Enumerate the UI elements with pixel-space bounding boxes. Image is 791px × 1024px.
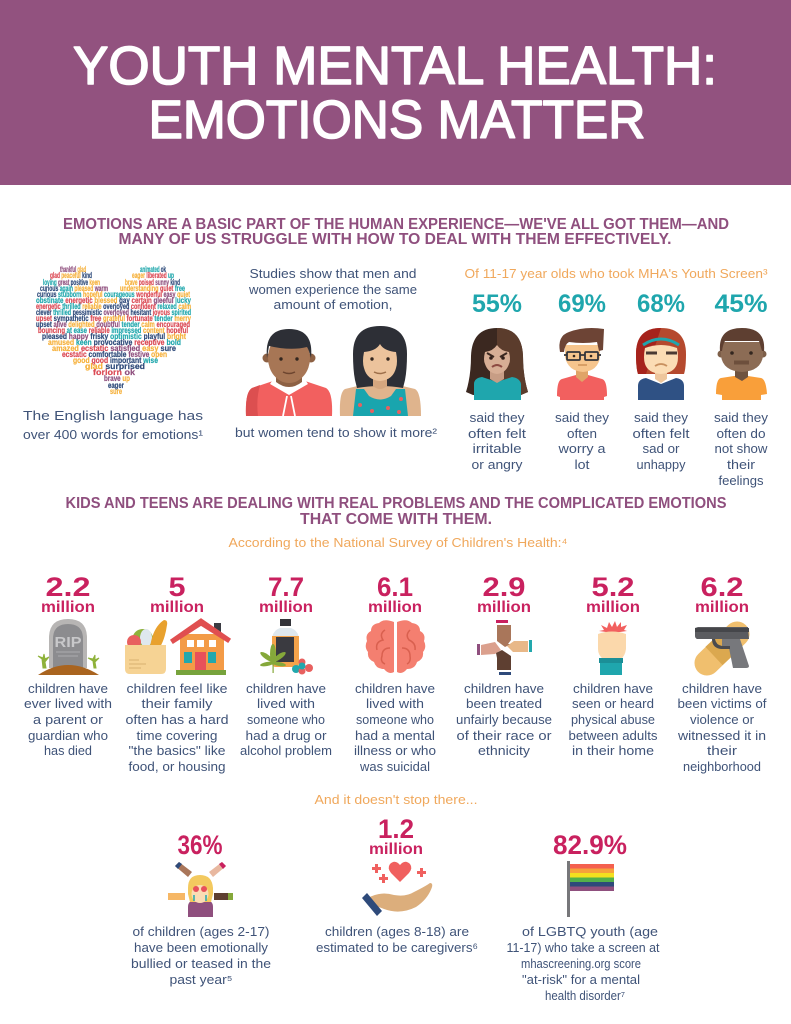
- word cloud heart: upset sympathetic free grateful fortunate tender merry: [36, 314, 191, 323]
- heart caption: over 400 words for emotions¹: [23, 427, 204, 442]
- label: health disorder⁷: [545, 988, 625, 1003]
- label: irritable: [472, 441, 522, 456]
- label: [506, 924, 660, 1003]
- icon: fist with impact: [598, 621, 627, 675]
- word cloud heart: amazed ecstatic satisfied easy sure: [52, 344, 176, 353]
- stat: 6.1 million: million: [368, 599, 422, 616]
- stat: 7.7 million: 7.7: [268, 572, 304, 602]
- stat: 6.2 million: million: [695, 599, 749, 616]
- stat: 5.2 million: million: [586, 599, 640, 616]
- stat: 36% bullied: 36%: [178, 830, 222, 860]
- stat: 5.2 million: [568, 572, 658, 758]
- label: [568, 681, 658, 758]
- word cloud heart: eager liberated up: [132, 271, 174, 280]
- section heading: real problems: THAT COME WITH THEM.: [300, 511, 492, 528]
- label: [677, 681, 767, 774]
- label: of LGBTQ youth (age: [522, 924, 658, 939]
- stat: 2.2 million: million: [41, 599, 95, 616]
- stat: 68% sad: 68%: [637, 290, 685, 318]
- word cloud heart: thankful glad: [60, 265, 86, 274]
- label: said they: [634, 410, 689, 425]
- stat: 69% worry: 69%: [558, 290, 606, 318]
- label: alcohol problem: [240, 743, 332, 758]
- stat: 69% worry: [555, 290, 610, 472]
- stat: 6.1 million: 6.1: [377, 572, 413, 602]
- label: ethnicity: [478, 743, 531, 758]
- label: often do: [716, 426, 766, 441]
- stat: 2.9 million: 2.9: [482, 572, 526, 602]
- label: been treated: [466, 696, 542, 711]
- word cloud heart: obstinate energetic blessed gay certain gleeful lucky: [36, 296, 191, 305]
- word cloud heart: sure: [110, 387, 122, 396]
- stat: 82.9% LGBTQ: 82.9%: [553, 830, 627, 860]
- word cloud heart: energetic thrilled reliable overjoyed confident relaxed calm: [36, 302, 191, 311]
- label: children have: [682, 681, 762, 696]
- stat: 1.2 million caregivers: 1.2: [378, 814, 414, 844]
- stat: 5 million: 5: [168, 572, 186, 602]
- label: violence or: [690, 712, 755, 727]
- label: often felt: [468, 426, 526, 441]
- icon: gravestone: RIP: [54, 634, 82, 651]
- label: children have: [573, 681, 653, 696]
- youth screen lead-in: Of 11-17 year olds who took MHA's Youth Screen³: [464, 267, 768, 281]
- label: sad or: [642, 441, 680, 456]
- icon: sad girl with headband: [636, 328, 686, 400]
- label: of their race or: [456, 728, 552, 743]
- stat: 6.2 million: [677, 572, 767, 774]
- intro heading: [63, 216, 729, 248]
- studies text: amount of emotion,: [274, 297, 392, 312]
- label: seen or heard: [572, 696, 654, 711]
- label: estimated to be caregivers⁶: [316, 940, 478, 955]
- word cloud heart: good good important wise: [73, 356, 158, 365]
- label: said they: [714, 410, 769, 425]
- label: worry a: [557, 441, 606, 456]
- icon: gravestone: [38, 619, 99, 675]
- icon: bottle, leaf and pills: [259, 619, 313, 674]
- word cloud heart: curious again pleased warm: [40, 284, 108, 293]
- label: [240, 681, 332, 758]
- label: been victims of: [678, 696, 767, 711]
- label: mhascreening.org score: [521, 956, 641, 971]
- icon: neutral boy: [716, 328, 767, 400]
- label: said they: [555, 410, 610, 425]
- icon: bullied child pointed at: [168, 862, 233, 917]
- label: unfairly because: [456, 712, 552, 727]
- word cloud heart: forlorn ok: [93, 368, 136, 377]
- label: in their home: [572, 743, 654, 758]
- title: EMOTIONS MATTER: [148, 90, 646, 150]
- word cloud heart: pleased happy frisky optimistic playful bright: [42, 332, 186, 341]
- word cloud heart: [36, 265, 191, 396]
- label: past year⁵: [170, 972, 232, 987]
- label: food, or housing: [128, 759, 226, 774]
- label: [24, 681, 112, 758]
- caption: women show it more: but women tend to show it more²: [235, 425, 438, 440]
- label: children feel like: [126, 681, 228, 696]
- stat: 2.2 million: 2.2: [46, 572, 90, 602]
- stat: 55% irritable: 55%: [472, 290, 522, 318]
- icon: groceries: [125, 620, 167, 674]
- label: time covering: [136, 728, 218, 743]
- word cloud heart: brave up: [104, 374, 130, 383]
- word cloud heart: eager: [108, 381, 124, 390]
- section heading: real problems: KIDS AND TEENS ARE DEALING WITH REAL PROBLEMS AND THE COMPLICATED EMOTIONS: [66, 495, 727, 512]
- label: or angry: [472, 457, 523, 472]
- studies text: [248, 266, 417, 312]
- word cloud heart: curious stubborn hopeful courageous wonderful easy quiet: [37, 290, 190, 299]
- stat: 6.2 million: 6.2: [700, 572, 744, 602]
- label: children have: [246, 681, 326, 696]
- label: "at-risk" for a mental: [522, 972, 640, 987]
- survey lead-in: According to the National Survey of Children's Health:⁴: [228, 536, 568, 550]
- label: their: [707, 743, 738, 758]
- label: between adults: [568, 728, 658, 743]
- icon: gun and bandage: [695, 627, 749, 668]
- label: of children (ages 2-17): [132, 924, 270, 939]
- intro heading: MANY OF US STRUGGLE WITH HOW TO DEAL WITH THEM EFFECTIVELY.: [118, 231, 672, 248]
- label: someone who: [356, 712, 434, 727]
- label: children have: [355, 681, 435, 696]
- word cloud heart: animated ok: [140, 265, 166, 274]
- stat: 5.2 million: 5.2: [592, 572, 634, 602]
- stat: 5 million: [125, 572, 230, 774]
- label: [468, 410, 526, 472]
- stat: 2.9 million: [456, 572, 552, 758]
- icon: four hands: [477, 620, 532, 675]
- label: was suicidal: [359, 759, 430, 774]
- word cloud heart: bouncing at ease reliable impressed content hopeful: [38, 326, 188, 335]
- label: a parent or: [33, 712, 104, 727]
- word cloud heart: glad peaceful kind: [50, 271, 92, 280]
- label: 11-17) who take a screen at: [506, 940, 660, 955]
- label: have been emotionally: [134, 940, 269, 955]
- label: "the basics" like: [128, 743, 226, 758]
- label: often has a hard: [126, 712, 228, 727]
- studies text: Studies show that men and: [250, 266, 416, 281]
- label: had a drug or: [246, 728, 327, 743]
- label: [316, 924, 478, 955]
- label: said they: [470, 410, 525, 425]
- stat: 6.1 million: [354, 572, 436, 774]
- intro heading: EMOTIONS ARE A BASIC PART OF THE HUMAN EXPERIENCE—WE'VE ALL GOT THEM—AND: [63, 216, 729, 233]
- icon: rainbow flag: [567, 861, 614, 917]
- label: guardian who: [28, 728, 108, 743]
- label: children (ages 8-18) are: [325, 924, 469, 939]
- label: witnessed it in: [677, 728, 766, 743]
- label: [131, 924, 271, 987]
- word cloud heart: loving great positive keen: [43, 278, 100, 287]
- section heading: real problems: [66, 495, 727, 528]
- icon: boy with glasses: [557, 328, 607, 400]
- icon: house: [171, 619, 230, 675]
- label: [354, 681, 436, 774]
- label: unhappy: [636, 457, 686, 472]
- label: ever lived with: [24, 696, 112, 711]
- label: had a mental: [355, 728, 435, 743]
- title: [73, 36, 717, 150]
- icon: hand holding heart: [362, 862, 432, 916]
- word cloud heart: upset alive delighted doubtful tender calm encouraged: [36, 320, 190, 329]
- label: their family: [142, 696, 213, 711]
- icon: brain: [366, 620, 425, 673]
- label: often: [567, 426, 597, 441]
- stat: 36% bullied: [131, 830, 271, 987]
- label: feelings: [718, 473, 764, 488]
- label: their: [727, 457, 756, 472]
- heart caption: The English language has: [23, 408, 204, 423]
- label: physical abuse: [571, 712, 655, 727]
- stat: 2.9 million: million: [477, 599, 531, 616]
- stat: 55% irritable: [466, 290, 528, 472]
- label: neighborhood: [683, 759, 761, 774]
- stat: 1.2 million caregivers: million: [369, 841, 423, 858]
- label: lot: [574, 457, 590, 472]
- title: YOUTH MENTAL HEALTH:: [73, 36, 717, 96]
- lead-in: it doesn't stop there: And it doesn't stop there...: [314, 793, 478, 807]
- icon: angry girl: [466, 328, 528, 400]
- stat: 5 million: million: [150, 599, 204, 616]
- label: lived with: [257, 696, 315, 711]
- stat: 45% don't show: [714, 290, 769, 488]
- stat: 68% sad: [632, 290, 690, 472]
- stat: 1.2 million caregivers: [316, 814, 478, 955]
- icon: boy in red hoodie: [246, 329, 332, 416]
- label: [126, 681, 228, 774]
- label: has died: [44, 743, 92, 758]
- label: often felt: [632, 426, 690, 441]
- stat: 82.9% LGBTQ: [506, 830, 660, 1003]
- label: illness or who: [354, 743, 436, 758]
- studies text: women experience the same: [248, 282, 417, 297]
- word cloud heart: understanding quiet free: [120, 284, 185, 293]
- stat: 7.7 million: million: [259, 599, 313, 616]
- icon: woman with dark hair: [340, 326, 421, 416]
- word cloud heart: brave poised sunny kind: [125, 278, 180, 287]
- label: bullied or teased in the: [131, 956, 271, 971]
- label: [555, 410, 610, 472]
- word cloud heart: ecstatic comfortable festive open: [62, 350, 167, 359]
- label: not show: [714, 441, 768, 456]
- word cloud heart: clever thrilled pessimistic overjoyed hesitant joyous spirited: [36, 308, 191, 317]
- stat: 45% don't show: 45%: [714, 290, 768, 318]
- label: lived with: [366, 696, 424, 711]
- label: [714, 410, 769, 488]
- label: children have: [464, 681, 544, 696]
- stat: 7.7 million: [240, 572, 332, 758]
- label: children have: [28, 681, 108, 696]
- stat: 2.2 million: [24, 572, 112, 758]
- heart caption: [23, 408, 204, 442]
- header banner: [0, 0, 791, 185]
- label: someone who: [247, 712, 325, 727]
- word cloud heart: amused keen provocative receptive bold: [48, 338, 181, 347]
- word cloud heart: glad surprised: [85, 362, 145, 371]
- label: [632, 410, 690, 472]
- label: [456, 681, 552, 758]
